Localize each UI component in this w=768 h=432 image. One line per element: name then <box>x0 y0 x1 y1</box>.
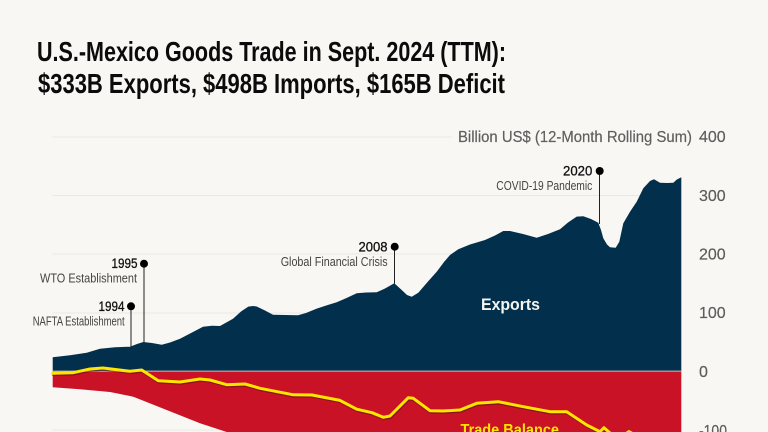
annotation: 1994 NAFTA: 1994 <box>98 298 125 314</box>
zero baseline <box>53 371 681 372</box>
y axis labels: 400 <box>699 129 726 146</box>
annotation: 1995 WTO: 1995 <box>112 255 138 271</box>
annotation: 2008 crisis: Global Financial Crisis <box>281 255 388 269</box>
annotation: 2020 pandemic: 2020 <box>563 163 592 179</box>
annotation: 1995 WTO <box>40 255 148 342</box>
y axis labels: 200 <box>699 246 726 264</box>
label: exports: Exports <box>481 296 540 314</box>
annotation: 1995 WTO: WTO Establishment <box>40 272 137 286</box>
annotation: 2020 pandemic: COVID-19 Pandemic <box>496 179 592 193</box>
line: trade balance <box>53 368 641 432</box>
y axis labels <box>699 129 727 432</box>
annotation: 2008 crisis <box>281 239 399 284</box>
title: $333B Exports, $498B Imports, $165B Deficit <box>38 68 505 99</box>
y axis labels: 300 <box>699 188 726 205</box>
annotation: 2020 pandemic <box>496 163 604 224</box>
annotation: 1994 NAFTA: NAFTA Establishment <box>33 314 125 328</box>
y axis labels: 100 <box>699 305 726 322</box>
title: U.S.-Mexico Goods Trade in Sept. 2024 (TTM): <box>37 36 506 67</box>
area: exports <box>53 177 681 371</box>
y axis labels: 0 <box>699 364 708 381</box>
annotation: 1994 NAFTA <box>33 298 135 347</box>
axis title: Billion US$ (12-Month Rolling Sum) <box>458 129 692 146</box>
annotation: 2008 crisis: 2008 <box>358 239 388 255</box>
area: imports <box>53 371 681 432</box>
title <box>37 36 506 99</box>
